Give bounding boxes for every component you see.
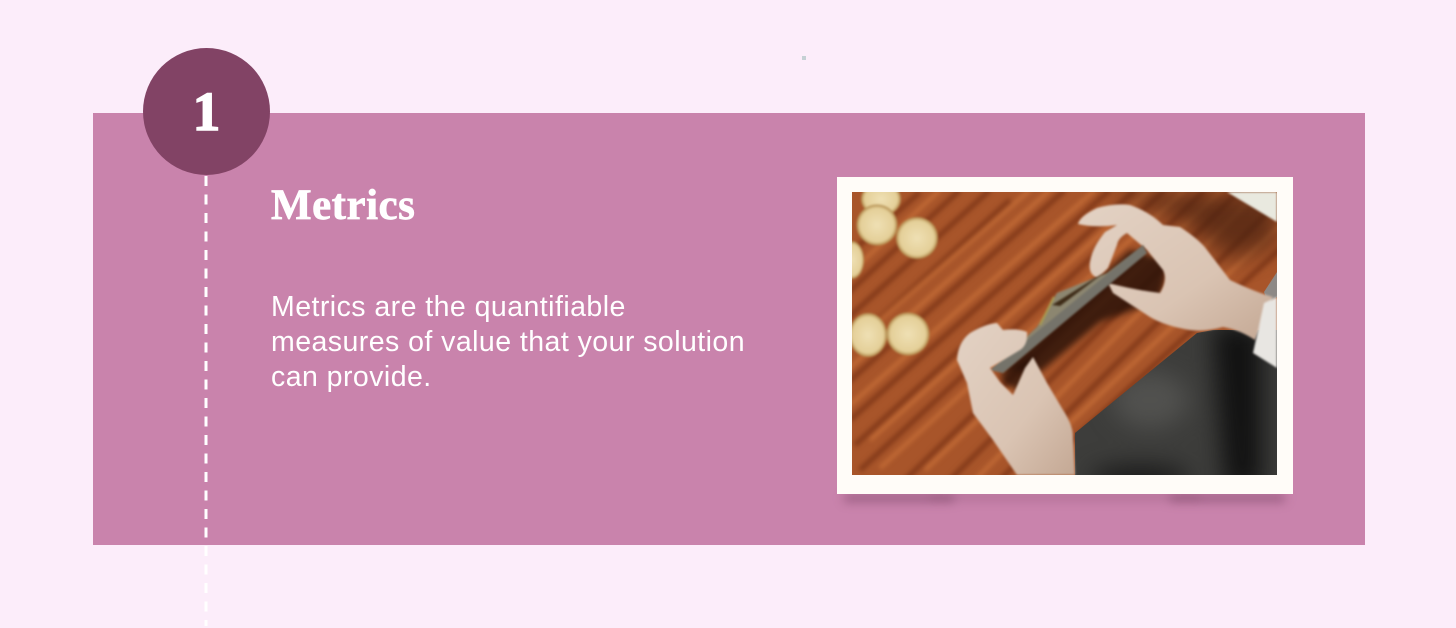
dashed timeline connector: [204, 176, 208, 626]
body text: measures of value that your solution: [271, 326, 745, 358]
shadow under hands: [1000, 250, 1170, 395]
paper corner: [1227, 192, 1277, 222]
cash: [990, 245, 1147, 373]
panel: metrics: [92, 112, 1365, 545]
number badge: 1: [193, 81, 220, 142]
photo card shadow: [841, 494, 1288, 507]
body text: [271, 291, 745, 393]
heading: Metrics: [271, 182, 415, 229]
tiny grey marker: [802, 56, 806, 60]
body text: can provide.: [271, 361, 432, 393]
shirt cuff: [1253, 297, 1277, 368]
dark floor: [1075, 330, 1277, 475]
wooden table: [840, 190, 1290, 480]
number badge: [143, 48, 270, 175]
body text: Metrics are the quantifiable: [271, 291, 626, 323]
right hand: [1078, 204, 1273, 340]
coins: [840, 182, 938, 357]
table edge trim: [1264, 272, 1277, 303]
photo card: [836, 176, 1292, 494]
photo: hands counting cash over a wooden table with coins: [852, 192, 1277, 475]
left hand: [957, 323, 1075, 475]
